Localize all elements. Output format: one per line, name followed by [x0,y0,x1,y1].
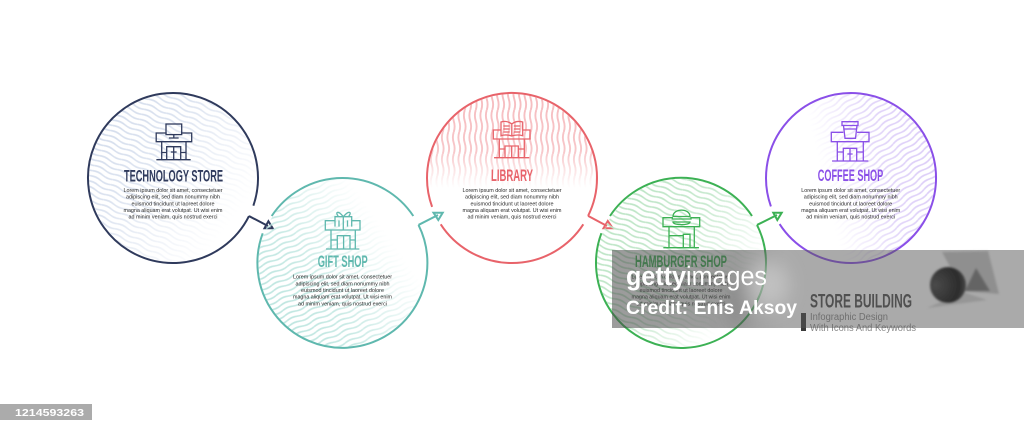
wave pattern [88,93,258,263]
text block: magna aliquam erat volutpat. Ut wisi enim [293,295,392,301]
heading: HAMBURGER SHOP [635,253,727,271]
text block: ad minim veniam, quis nostrud exerci [298,301,387,307]
text block: magna aliquam erat volutpat. Ut wisi enim [632,295,731,301]
subtitle: With Icons And Keywords [810,323,916,334]
icon: book store [493,121,530,158]
text block: adipiscing elit, sed diam nonummy nibh [296,281,390,287]
image id tag [0,404,92,420]
text block: euismod tincidunt ut laoreet dolore [809,201,892,207]
icon: gift store [325,212,360,249]
panel: library [427,93,613,263]
text block: euismod tincidunt ut laoreet dolore [301,288,384,294]
subtitle: Infographic Design [810,312,888,323]
panel: hamburger shop [596,178,782,348]
ring with arrow [427,93,613,263]
text block [462,188,562,221]
panel: coffee shop [766,93,936,263]
text block: adipiscing elit, sed diam nonummy nibh [465,195,559,201]
text block: adipiscing elit, sed diam nonummy nibh [126,195,220,201]
subtitle [810,312,916,334]
text block [293,275,392,307]
panel: gift shop [257,178,443,348]
text block: magna aliquam erat volutpat. Ut wisi enim [124,208,223,214]
watermark band [612,250,1024,328]
text block: ad minim veniam, quis nostrud exerci [128,215,218,221]
wave pattern [430,94,596,182]
ring [766,93,936,263]
text block [632,275,731,307]
text block [801,188,901,221]
text block: ad minim veniam, quis nostrud exerci [468,215,556,221]
watermark credit: Credit: Enis Aksoy [626,298,797,319]
text block: euismod tincidunt ut laoreet dolore [132,201,214,207]
heading: store building: STORE BUILDING [810,292,912,312]
text block: Lorem ipsum dolor sit amet, consectetuer [632,275,731,281]
text block: magna aliquam erat volutpat. Ut wisi enim [801,208,901,214]
wave pattern [258,178,428,348]
panel: technology store [88,93,273,263]
text block: ad minim veniam, quis nostrud exerci [636,301,726,307]
text block: adipiscing elit, sed diam nonummy nibh [804,195,898,201]
icon: computer store [156,124,192,160]
text block: euismod tincidunt ut laoreet dolore [640,288,722,294]
heading: GIFT SHOP [318,253,368,271]
text block: ad minim veniam, quis nostrud exerci [806,215,895,221]
accent bar [801,313,806,331]
geometric shapes [927,251,999,308]
heading: TECHNOLOGY STORE [124,168,223,186]
text block: Lorem ipsum dolor sit amet, consectetuer [801,188,900,194]
icon: burger store [663,210,700,248]
text block: adipiscing elit, sed diam nonummy nibh [634,281,728,287]
ring with arrow [88,93,273,263]
watermark logo: gettyimages [626,261,767,291]
text block: Lorem ipsum dolor sit amet, consectetuer [124,188,223,194]
text block [124,188,223,221]
wave pattern [596,178,766,348]
wave pattern [818,94,935,260]
heading: LIBRARY [491,167,533,185]
icon: coffee store [831,122,869,161]
text block: Lorem ipsum dolor sit amet, consectetuer [293,275,392,281]
heading: COFFEE SHOP [818,167,883,185]
text block: magna aliquam erat volutpat. Ut wisi enim [462,208,562,214]
text block: Lorem ipsum dolor sit amet, consectetuer [462,188,562,194]
text block: euismod tincidunt ut laoreet dolore [470,201,554,207]
image id tag: 1214593263 [15,408,85,419]
ring with arrow [596,178,782,348]
ring with arrow [257,178,443,348]
